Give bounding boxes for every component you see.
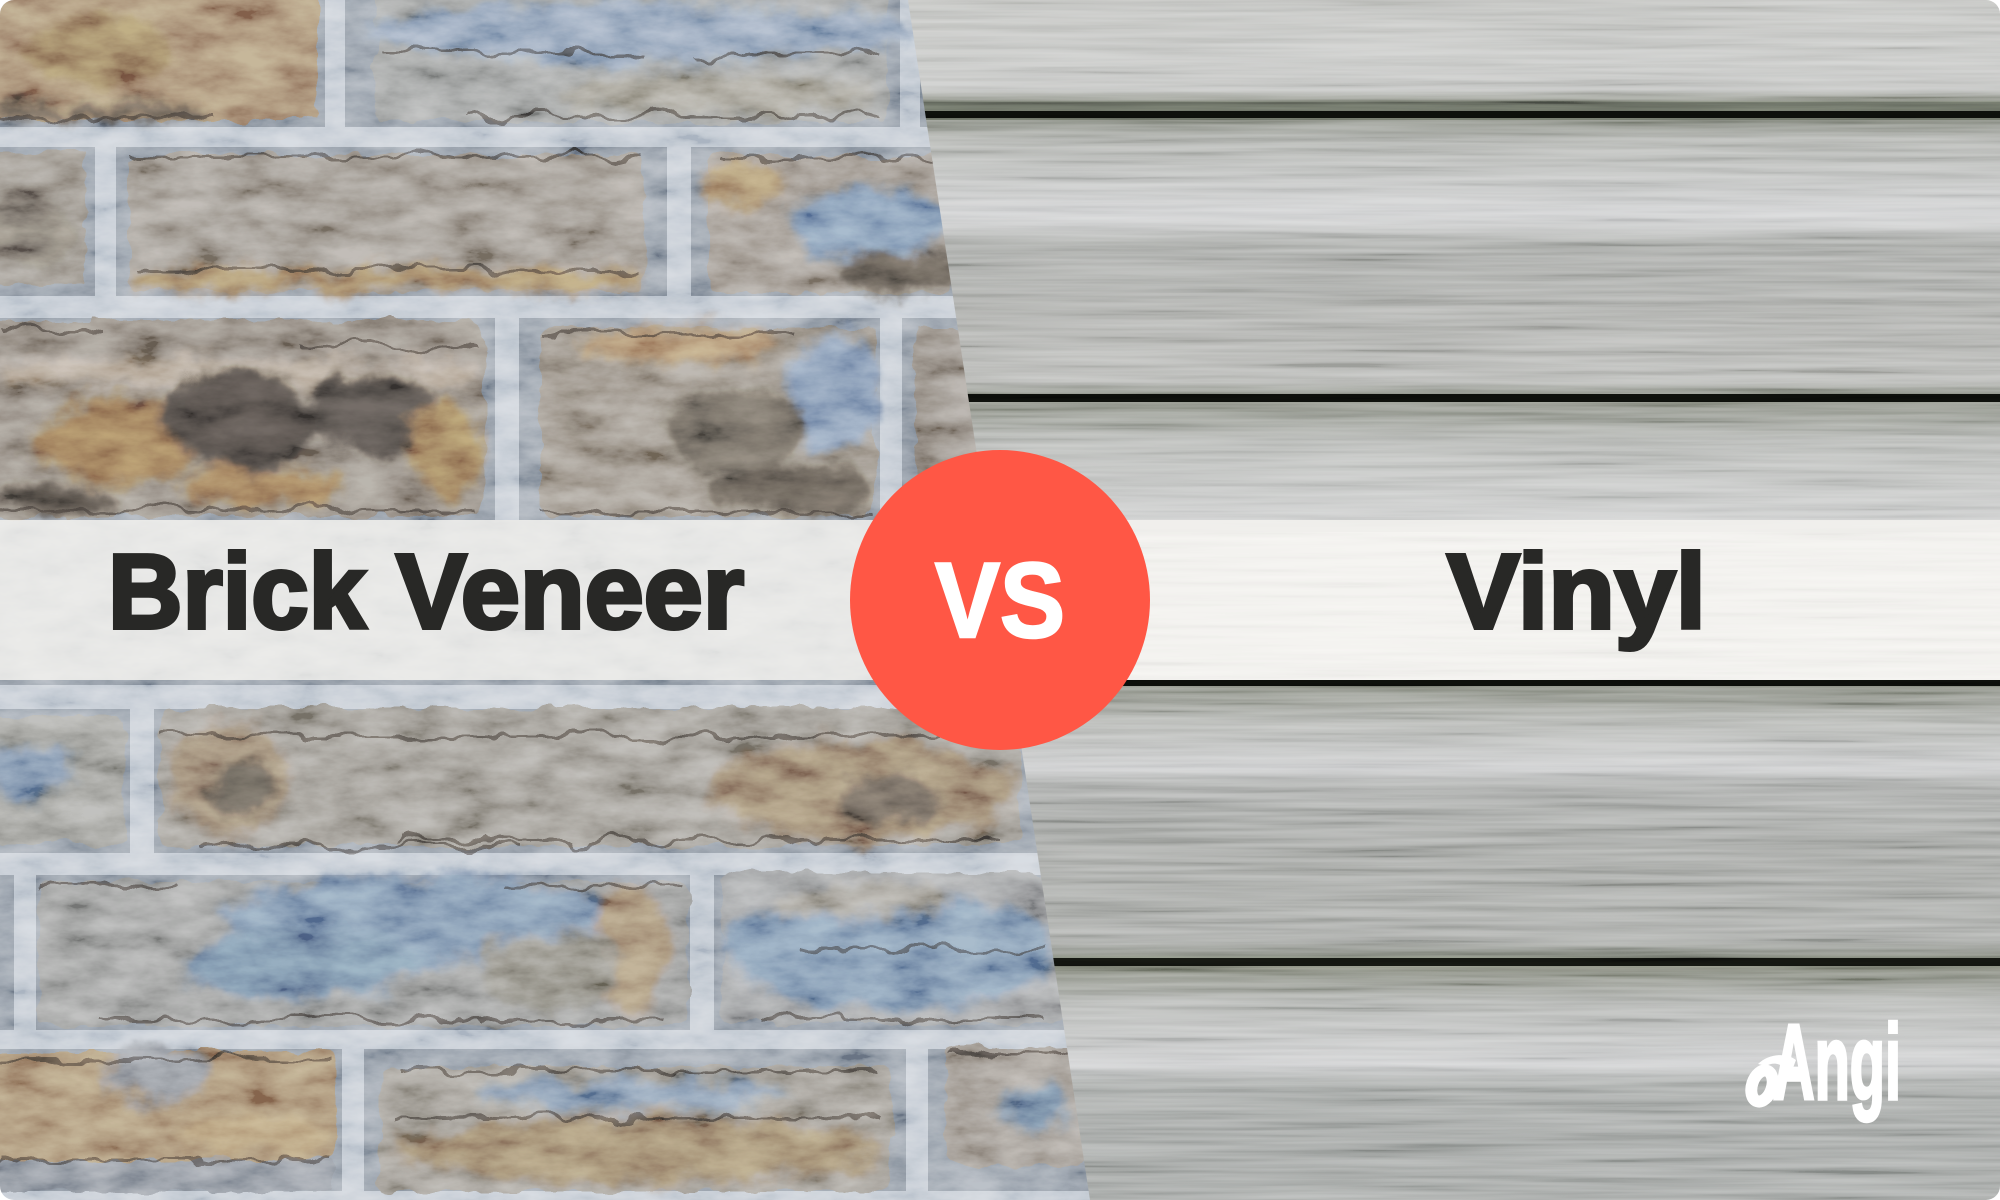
panel: brick veneer photo xyxy=(0,0,1100,1200)
heading: brick veneer: Brick xyxy=(108,533,367,651)
label band: white translucent strip xyxy=(0,520,2000,680)
heading: brick veneer xyxy=(112,549,744,631)
heading: brick veneer: Veneer xyxy=(396,533,744,651)
panel: vinyl siding photo xyxy=(880,0,2000,1200)
versus badge xyxy=(850,450,1150,750)
logo: Angi xyxy=(1745,1020,1898,1124)
versus badge: VS xyxy=(935,540,1065,660)
heading: vinyl: Vinyl xyxy=(1447,533,1706,651)
